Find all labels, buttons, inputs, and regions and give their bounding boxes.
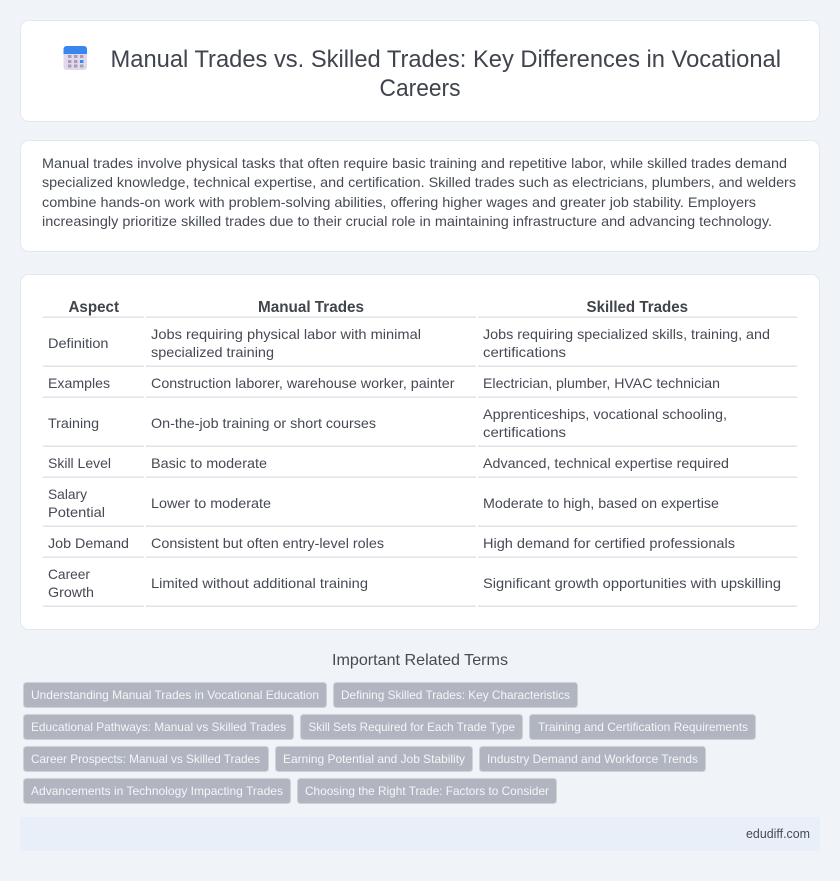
- row: salary potential: Moderate to high, based on expertise: [483, 495, 719, 511]
- row: definition: specialized training: [151, 344, 274, 360]
- row: job demand: Consistent but often entry-level roles: [151, 535, 384, 551]
- table header: Aspect: [68, 299, 120, 316]
- footer: edudiff.com: [746, 826, 810, 841]
- panel: comparison table: [20, 274, 820, 630]
- row: training: Apprenticeships, vocational schooling,: [483, 406, 727, 422]
- heading: important related terms: Important Related Terms: [332, 652, 508, 669]
- row: career growth: Limited without additional training: [151, 575, 368, 591]
- tag: Career Prospects: Manual vs Skilled Trades: [31, 752, 260, 766]
- panel: header: [20, 20, 820, 122]
- row: career growth: Growth: [48, 584, 94, 600]
- row: skill level: Skill Level: [48, 455, 111, 471]
- row: job demand: High demand for certified professionals: [483, 535, 735, 551]
- row: training: [43, 406, 797, 447]
- row: definition: Definition: [48, 335, 108, 351]
- panel: intro text: [20, 140, 820, 252]
- tag: [530, 714, 756, 740]
- panel: intro text: specialized knowledge, technical expertise, and certification. Skilled trades such as electricians, plumbers, and welders: [42, 174, 796, 190]
- row: skill level: Advanced, technical expertise required: [483, 455, 729, 471]
- panel: intro text: Manual trades involve physical tasks that often require basic training and repetitive labor, while skilled trades demand: [42, 155, 787, 171]
- tag: Choosing the Right Trade: Factors to Consider: [305, 784, 549, 798]
- row: training: certifications: [483, 424, 566, 440]
- row: job demand: [43, 535, 797, 558]
- row: salary potential: Lower to moderate: [151, 495, 271, 511]
- tag: [300, 714, 522, 740]
- related terms tags: [24, 682, 756, 804]
- tag: Industry Demand and Workforce Trends: [487, 752, 698, 766]
- tag: [24, 778, 290, 804]
- row: training: On-the-job training or short courses: [151, 415, 376, 431]
- row: skill level: Basic to moderate: [151, 455, 267, 471]
- panel: intro text: increasingly prioritize skilled trades due to their crucial role in maintaining infrastructure and advancing technology.: [42, 213, 772, 229]
- row: definition: [43, 326, 797, 367]
- row: examples: Examples: [48, 375, 110, 391]
- row: training: Training: [48, 415, 99, 431]
- tag: [24, 682, 326, 708]
- row: definition: Jobs requiring specialized skills, training, and: [483, 326, 770, 342]
- row: definition: Jobs requiring physical labor with minimal: [151, 326, 421, 342]
- row: salary potential: [43, 486, 797, 527]
- row: salary potential: Potential: [48, 504, 105, 520]
- panel: intro text: combine hands-on work with problem-solving abilities, offering higher wages and greater job stability. Employers: [42, 194, 756, 210]
- title: [110, 46, 781, 102]
- footer: [20, 817, 820, 851]
- title: Manual Trades vs. Skilled Trades: Key Differences in Vocational: [110, 46, 781, 73]
- row: examples: Electrician, plumber, HVAC technician: [483, 375, 720, 391]
- icon: calendar: [64, 46, 87, 70]
- tag: Educational Pathways: Manual vs Skilled Trades: [31, 720, 286, 734]
- tag: [276, 746, 472, 772]
- tag: [334, 682, 578, 708]
- tag: [24, 746, 268, 772]
- tag: [480, 746, 706, 772]
- tag: Defining Skilled Trades: Key Characteristics: [341, 688, 570, 702]
- table header: [43, 299, 797, 318]
- table header: Manual Trades: [258, 299, 364, 316]
- row: examples: [43, 375, 797, 398]
- title: Careers: [380, 75, 460, 102]
- tag: Training and Certification Requirements: [538, 720, 748, 734]
- row: career growth: [43, 566, 797, 607]
- tag: Understanding Manual Trades in Vocational Education: [31, 688, 319, 702]
- tag: [24, 714, 294, 740]
- tag: [298, 778, 556, 804]
- tag: Earning Potential and Job Stability: [283, 752, 465, 766]
- row: examples: Construction laborer, warehouse worker, painter: [151, 375, 455, 391]
- row: skill level: [43, 455, 797, 478]
- table header: Skilled Trades: [586, 299, 688, 316]
- tag: Skill Sets Required for Each Trade Type: [308, 720, 515, 734]
- row: career growth: Significant growth opportunities with upskilling: [483, 575, 781, 591]
- row: job demand: Job Demand: [48, 535, 129, 551]
- row: definition: certifications: [483, 344, 566, 360]
- row: career growth: Career: [48, 566, 90, 582]
- tag: Advancements in Technology Impacting Trades: [31, 784, 283, 798]
- row: salary potential: Salary: [48, 486, 87, 502]
